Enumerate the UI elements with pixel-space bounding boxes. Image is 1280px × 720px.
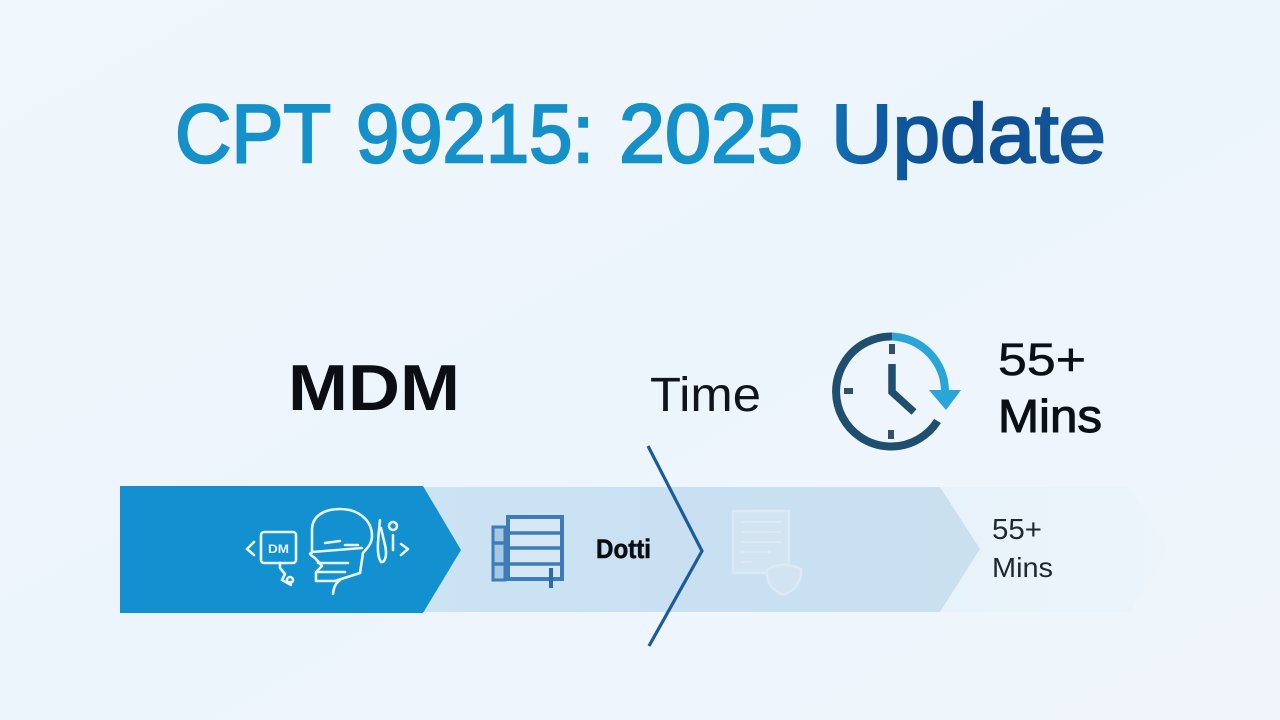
label: 55+ Mins in faded step: Mins xyxy=(992,552,1053,583)
icon: faded document with shield xyxy=(733,511,801,595)
divider chevron arrow xyxy=(648,446,702,646)
icon: clock with arrow xyxy=(836,336,961,446)
icon: data table xyxy=(493,517,562,588)
title xyxy=(175,87,1106,180)
label: 55+ Mins in faded step: 55+ xyxy=(992,514,1042,546)
label: data step: Dotti xyxy=(596,534,651,564)
chevron: third faded step xyxy=(940,487,1168,612)
title: 99215: xyxy=(356,87,594,180)
icon: MDM head and code symbols xyxy=(247,509,408,594)
title: CPT xyxy=(175,87,331,180)
label: 55+ Mins in faded step xyxy=(992,514,1053,583)
title: 2025 xyxy=(619,87,803,180)
chevron: first solid blue step xyxy=(120,486,461,613)
callout: 55+ Mins: 55+ xyxy=(998,334,1086,385)
chevron: second light step xyxy=(422,487,980,612)
callout: 55+ Mins xyxy=(998,334,1102,442)
heading: Time: Time xyxy=(650,369,761,422)
label: DM in box: DM xyxy=(268,542,289,556)
heading: MDM: MDM xyxy=(288,351,460,424)
title: Update xyxy=(831,87,1106,180)
callout: 55+ Mins: Mins xyxy=(998,390,1102,442)
